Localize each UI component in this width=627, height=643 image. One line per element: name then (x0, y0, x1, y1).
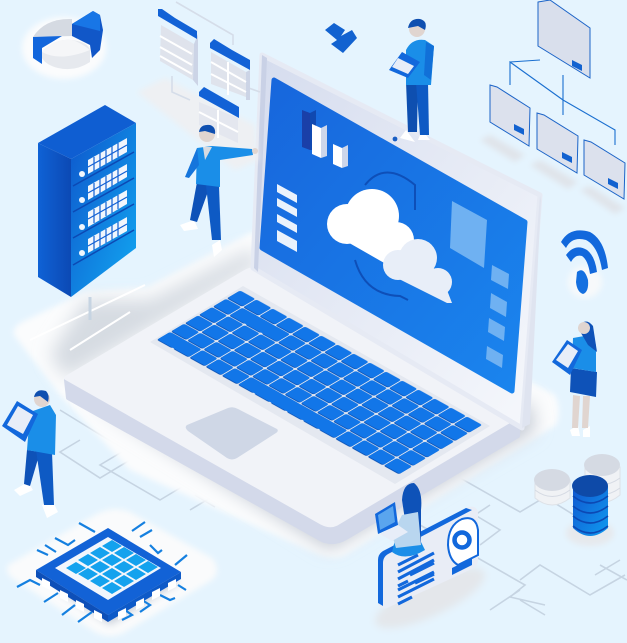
laptop screen (262, 80, 525, 391)
pie chart icon (22, 11, 106, 79)
person: woman with tablet (375, 483, 425, 557)
folder middle (537, 113, 578, 173)
folder right (584, 140, 625, 199)
person: top with laptop (389, 19, 434, 142)
laptop screen bezel (253, 55, 541, 428)
microchip (7, 509, 217, 636)
circuit lines (60, 410, 627, 615)
light panel on screen (450, 201, 487, 268)
blue disks (572, 475, 608, 536)
rack units (79, 138, 127, 256)
person: pointing man (180, 125, 258, 257)
table 3 (199, 87, 239, 143)
card text lines (398, 553, 434, 604)
person: man with laptop (2, 390, 58, 518)
database stacks (534, 454, 620, 546)
spreadsheet tables with connector lines (137, 2, 260, 170)
folder top (538, 0, 590, 78)
touchpad (186, 407, 278, 460)
laptop (66, 55, 541, 542)
3D bars on screen (302, 110, 348, 168)
settings card (368, 507, 492, 640)
wifi icon (561, 230, 608, 298)
gray disks (534, 454, 620, 505)
person: woman with laptop (552, 321, 597, 437)
cloud icon on screen (327, 189, 452, 303)
gear badge (448, 518, 478, 575)
laptop platform shadow (14, 232, 559, 558)
laptop base (66, 269, 519, 542)
sync arcs (355, 172, 415, 300)
folder hierarchy (480, 0, 625, 214)
side buttons on screen (486, 265, 509, 368)
chip pins and traces (17, 522, 187, 622)
table 1 (158, 9, 198, 86)
keyboard (156, 290, 483, 475)
chip grid (66, 540, 158, 594)
table 2 (210, 39, 250, 100)
arrow icon (325, 23, 357, 53)
list on screen (277, 184, 297, 252)
folder left (490, 85, 530, 146)
server rack (38, 105, 136, 320)
